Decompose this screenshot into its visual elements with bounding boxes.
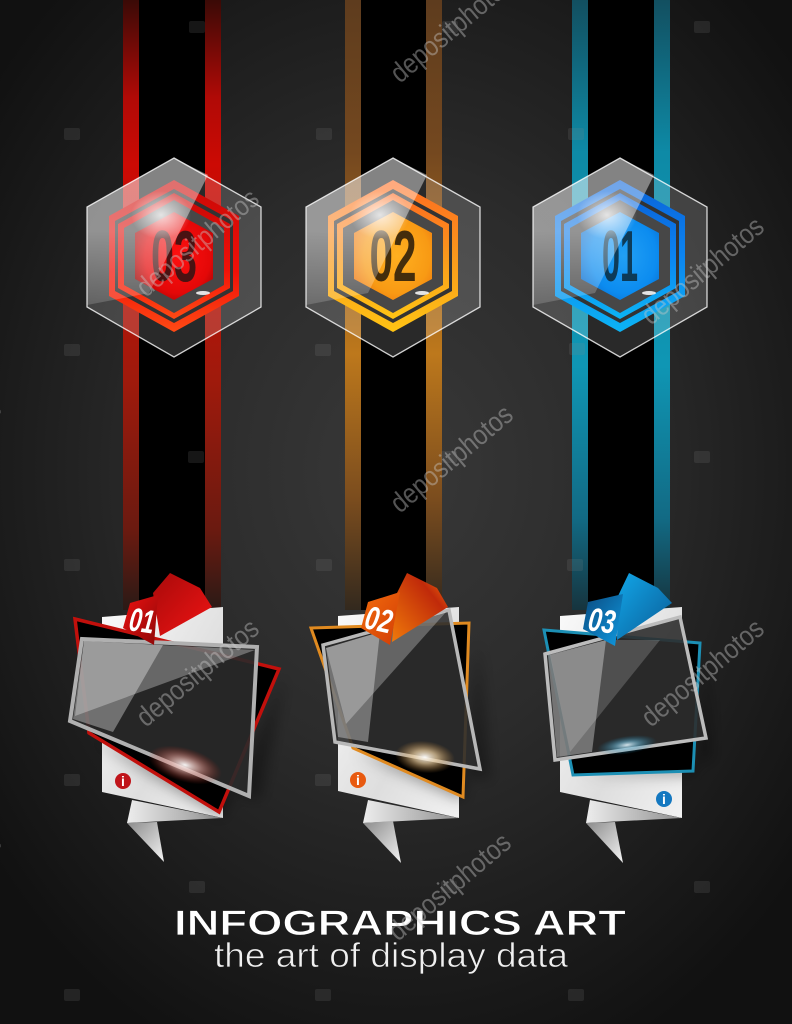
number tag	[123, 595, 158, 645]
paper tail	[586, 800, 682, 863]
ring outer	[109, 180, 239, 332]
number tag	[583, 594, 623, 646]
glass outline	[306, 158, 480, 357]
camera watermark icons	[64, 21, 710, 1001]
icon: info	[656, 791, 672, 807]
ring outer	[555, 180, 685, 332]
highlight	[415, 291, 429, 295]
hexagon badge 01 blue	[533, 158, 707, 357]
hexagon badge 02 orange	[306, 158, 480, 357]
ring outer	[328, 180, 458, 332]
origami panel 02 orange	[311, 573, 490, 863]
ring inner	[337, 193, 449, 319]
subtitle: the art of display data	[214, 937, 568, 975]
lens flare	[596, 732, 658, 758]
paper tail	[127, 800, 223, 862]
icon: info: i	[356, 772, 360, 788]
ribbon fold	[392, 573, 448, 642]
ring plate	[124, 200, 224, 313]
column strip: red	[123, 0, 221, 610]
glass outline	[533, 158, 707, 357]
glass glare	[87, 158, 208, 305]
watermarks: depositphotos	[130, 182, 265, 303]
highlight	[642, 291, 656, 295]
icon: info	[350, 772, 366, 788]
glass outline	[87, 158, 261, 357]
glass panel	[323, 610, 480, 769]
title: INFOGRAPHICS ART	[174, 904, 626, 943]
origami panel 03 blue	[544, 573, 712, 863]
number tag	[361, 592, 400, 645]
ring gap	[115, 189, 233, 323]
watermarks: depositphotos	[384, 398, 519, 519]
core	[581, 212, 659, 300]
tag number: 01	[127, 600, 157, 641]
watermarks: depositphotos	[635, 612, 770, 733]
ribbon fold	[153, 573, 212, 636]
hexagon badge 01 blue: 01	[602, 217, 638, 297]
origami panel 01 red	[70, 573, 285, 862]
ribbon fold	[617, 573, 672, 640]
orange frame	[311, 623, 469, 797]
lens flare	[144, 738, 226, 792]
watermarks: depositphotos	[130, 612, 265, 733]
blue frame	[544, 630, 700, 775]
hexagon badge 03 red	[87, 158, 261, 357]
icon: info: i	[662, 791, 666, 807]
icon: info	[115, 773, 131, 789]
ring plate	[343, 200, 443, 313]
number: 02	[370, 217, 416, 297]
glass panel	[545, 617, 706, 760]
icon: info: i	[121, 773, 125, 789]
paper tail	[363, 800, 459, 863]
core	[135, 212, 213, 300]
tag number: 03	[586, 600, 618, 641]
lens flare	[393, 738, 457, 776]
frame shadow	[92, 675, 285, 818]
core	[354, 212, 432, 300]
glare glow	[350, 191, 410, 239]
highlight	[196, 291, 210, 295]
glare glow	[577, 191, 637, 239]
ring plate	[570, 200, 670, 313]
ring gap	[334, 189, 452, 323]
column strip: blue	[572, 0, 670, 610]
frame shadow	[580, 650, 712, 775]
glass glare	[306, 158, 427, 305]
glass panel	[70, 639, 257, 796]
paper	[338, 607, 459, 818]
ring gap	[561, 189, 679, 323]
watermarks: depositphotos	[382, 826, 517, 947]
ring inner	[118, 193, 230, 319]
glare glow	[131, 191, 191, 239]
frame shadow	[356, 640, 490, 802]
watermarks: depositphotos	[635, 210, 770, 331]
number: 03	[151, 217, 197, 297]
paper	[560, 607, 682, 818]
red frame	[75, 619, 279, 812]
paper	[102, 607, 223, 818]
glass glare	[533, 158, 654, 305]
column strip: orange	[345, 0, 442, 610]
ring inner	[564, 193, 676, 319]
tag number: 02	[362, 599, 396, 640]
